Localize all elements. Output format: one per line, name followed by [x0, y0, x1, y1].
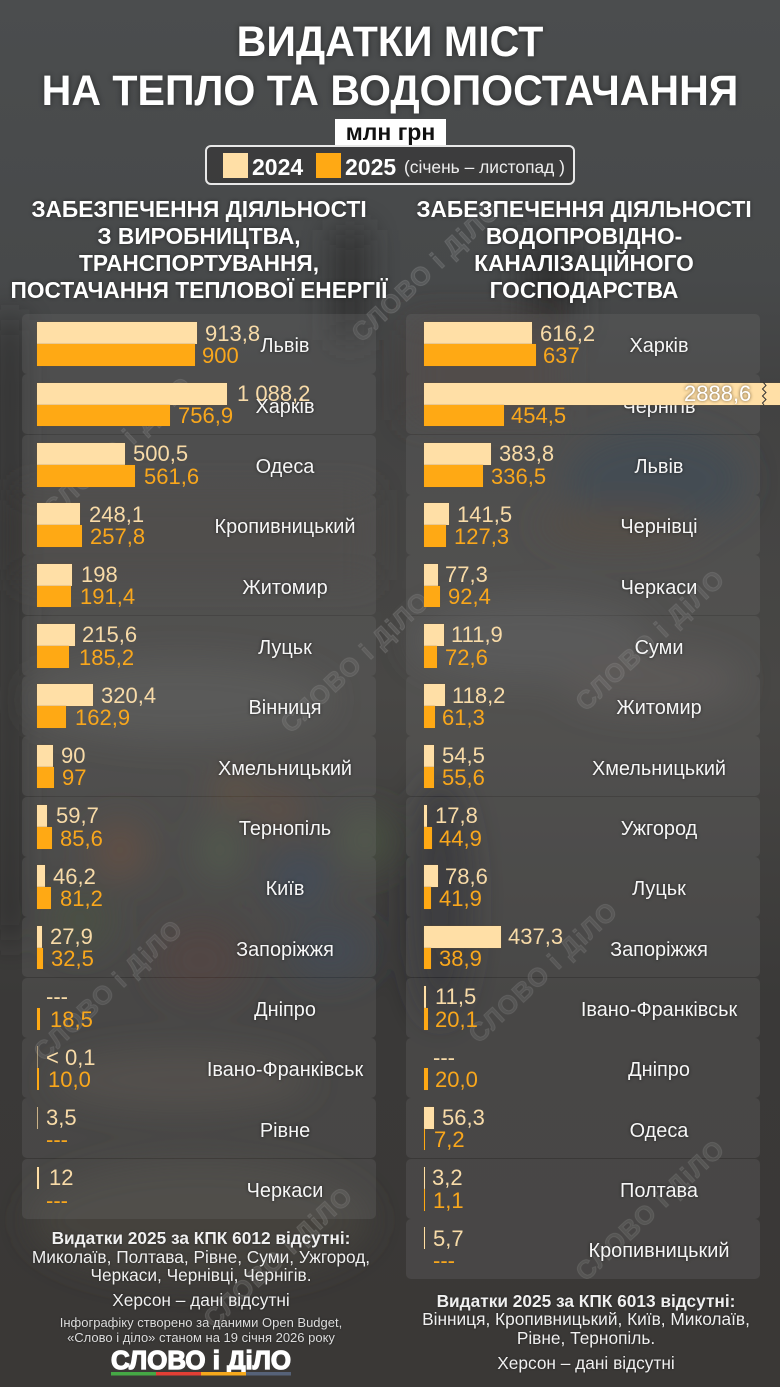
- row: Суми: Суми: [635, 637, 683, 659]
- row: Кропивницький: Кропивницький: [215, 516, 355, 538]
- row: Вінниця: 320,4: [101, 683, 156, 708]
- row: Харків: Харків: [255, 396, 315, 418]
- row: Житомир: 191,4: [80, 584, 135, 609]
- row: Одеса: [406, 1098, 760, 1158]
- row: Кропивницький: [22, 495, 376, 555]
- note: Kherson: Херсон – дані відсутні: [497, 1353, 675, 1373]
- row: Рівне: [22, 1098, 376, 1158]
- row: Дніпро: ---: [46, 984, 68, 1009]
- row: Кропивницький: ---: [433, 1248, 455, 1273]
- row: Івано-Франківськ: 10,0: [48, 1067, 91, 1092]
- row: Суми: [406, 616, 760, 676]
- row: Тернопіль: 85,6: [60, 826, 103, 851]
- row: Суми: 72,6: [445, 645, 488, 670]
- row: Харків: Харків: [629, 335, 689, 357]
- row: Київ: Київ: [266, 878, 304, 900]
- heading: heat: З ВИРОБНИЦТВА,: [97, 223, 301, 249]
- row: Львів: Львів: [260, 335, 309, 357]
- row: Луцьк: Луцьк: [258, 637, 312, 659]
- heading: water: ГОСПОДАРСТВА: [490, 277, 678, 303]
- heading: heat: ПОСТАЧАННЯ ТЕПЛОВОЇ ЕНЕРГІЇ: [11, 277, 387, 303]
- row: Житомир: 118,2: [452, 683, 505, 708]
- row: Запоріжжя: 38,9: [439, 946, 482, 971]
- row: Чернівці: Чернівці: [620, 516, 698, 538]
- heading: water: КАНАЛІЗАЦІЙНОГО: [474, 250, 694, 276]
- panel: heat chart: [22, 314, 376, 1219]
- note: missing water data: Вінниця, Кропивницький, Київ, Миколаїв,: [422, 1309, 750, 1329]
- icon: axis break zigzag: [762, 382, 767, 405]
- row: Чернігів: [406, 374, 760, 434]
- source credit: «Слово і діло» станом на 19 січня 2026 року: [67, 1330, 335, 1345]
- row: Полтава: 3,2: [432, 1165, 463, 1190]
- row: Одеса: 56,3: [442, 1105, 485, 1130]
- row: Львів: 336,5: [491, 464, 546, 489]
- row: Івано-Франківськ: < 0,1: [46, 1045, 96, 1070]
- legend: [205, 145, 575, 185]
- row: Львів: [406, 435, 760, 495]
- row: Чернівці: 141,5: [457, 502, 512, 527]
- title: ВИДАТКИ МІСТ: [237, 19, 543, 66]
- row: Івано-Франківськ: [22, 1038, 376, 1098]
- row: Ужгород: [406, 797, 760, 857]
- row: Кропивницький: [406, 1219, 760, 1279]
- row: Кропивницький: 5,7: [433, 1226, 464, 1251]
- row: Житомир: [22, 555, 376, 615]
- row: Київ: 46,2: [53, 864, 96, 889]
- row: Вінниця: Вінниця: [249, 697, 321, 719]
- row: Черкаси: Черкаси: [621, 577, 697, 599]
- row: Івано-Франківськ: 11,5: [435, 984, 476, 1009]
- row: Харків: 1 088,2: [237, 381, 310, 406]
- source credit: [60, 1315, 342, 1345]
- row: Ужгород: 17,8: [435, 803, 478, 828]
- row: Хмельницький: [406, 736, 760, 796]
- row: Львів: Львів: [634, 456, 683, 478]
- row: Черкаси: 92,4: [448, 584, 491, 609]
- row: Одеса: [22, 435, 376, 495]
- row: Тернопіль: 59,7: [56, 803, 99, 828]
- title: НА ТЕПЛО ТА ВОДОПОСТАЧАННЯ: [42, 68, 738, 115]
- row: Дніпро: 18,5: [50, 1007, 93, 1032]
- row: Хмельницький: 97: [62, 765, 86, 790]
- row: Рівне: Рівне: [260, 1120, 310, 1142]
- row: Івано-Франківськ: 20,1: [435, 1007, 478, 1032]
- row: Запоріжжя: Запоріжжя: [610, 939, 708, 961]
- note: missing heat data: Черкаси, Чернівці, Чернігів.: [90, 1265, 312, 1285]
- row: Черкаси: Черкаси: [247, 1180, 323, 1202]
- note heading: Видатки 2025 за КПК 6012 відсутні:: [52, 1228, 350, 1248]
- legend label 2024: 2024: [252, 154, 303, 180]
- row: Хмельницький: Хмельницький: [218, 758, 352, 780]
- row: Хмельницький: Хмельницький: [592, 758, 726, 780]
- row: Одеса: 561,6: [144, 464, 199, 489]
- note heading: Видатки 2025 за КПК 6013 відсутні:: [437, 1290, 735, 1310]
- legend period: (січень – листопад ): [404, 157, 565, 177]
- row: Житомир: Житомир: [616, 697, 702, 719]
- row: Кропивницький: Кропивницький: [589, 1240, 729, 1262]
- note: missing water data: Рівне, Тернопіль.: [517, 1328, 655, 1348]
- row: Київ: 81,2: [60, 886, 103, 911]
- watermark: СЛОВО і ДіЛО: [569, 1133, 731, 1287]
- note: missing water data: [422, 1290, 750, 1373]
- row: Чернігів: Чернігів: [622, 396, 696, 418]
- row: Харків: 756,9: [178, 403, 233, 428]
- note: missing heat data: Миколаїв, Полтава, Рівне, Суми, Ужгород,: [32, 1246, 370, 1266]
- row: Запоріжжя: Запоріжжя: [236, 939, 334, 961]
- row: Харків: 637: [543, 343, 580, 368]
- row: Полтава: [406, 1159, 760, 1219]
- row: Суми: 111,9: [451, 622, 503, 647]
- row: Тернопіль: [22, 797, 376, 857]
- row: Луцьк: 41,9: [439, 886, 482, 911]
- row: Дніпро: 20,0: [435, 1067, 478, 1092]
- note: missing heat data: [32, 1228, 370, 1310]
- row: Житомир: 61,3: [442, 705, 485, 730]
- heading: water: ВОДОПРОВІДНО-: [486, 223, 682, 249]
- watermark: СЛОВО і ДіЛО: [569, 563, 731, 717]
- row: Вінниця: 162,9: [75, 705, 130, 730]
- watermark: СЛОВО і ДіЛО: [197, 1180, 359, 1334]
- legend swatch 2025: [316, 153, 341, 178]
- heading: water: [416, 196, 752, 304]
- source credit: Інфографіку створено за даними Open Budget,: [60, 1315, 342, 1330]
- legend swatch 2024: [223, 153, 248, 178]
- watermark: СЛОВО і ДіЛО: [274, 585, 436, 739]
- heading: heat: ЗАБЕЗПЕЧЕННЯ ДІЯЛЬНОСТІ: [31, 196, 367, 222]
- row: Львів: [22, 314, 376, 374]
- row: Хмельницький: [22, 736, 376, 796]
- row: Хмельницький: 54,5: [442, 743, 485, 768]
- row: Дніпро: [22, 978, 376, 1038]
- row: Чернігів: 454,5: [511, 403, 566, 428]
- panel: water chart: [406, 314, 780, 1279]
- unit label: млн грн: [346, 119, 435, 145]
- row: Чернігів: 2888,6: [684, 381, 751, 406]
- row: Одеса: Одеса: [256, 456, 314, 478]
- row: Луцьк: 78,6: [445, 864, 488, 889]
- row: Дніпро: ---: [433, 1045, 455, 1070]
- row: Запоріжжя: [406, 917, 760, 977]
- row: Дніпро: Дніпро: [628, 1059, 690, 1081]
- title: [42, 19, 738, 115]
- row: Черкаси: [22, 1159, 376, 1219]
- row: Луцьк: 185,2: [79, 645, 134, 670]
- watermark: СЛОВО і ДіЛО: [345, 194, 507, 348]
- row: Луцьк: [22, 616, 376, 676]
- row: Харків: [22, 374, 376, 434]
- row: Ужгород: 44,9: [439, 826, 482, 851]
- watermark: СЛОВО і ДіЛО: [27, 913, 189, 1067]
- row: Житомир: [406, 676, 760, 736]
- row: Луцьк: 215,6: [82, 622, 137, 647]
- row: Одеса: Одеса: [630, 1120, 688, 1142]
- heading: heat: [10, 196, 388, 303]
- row: Черкаси: 12: [49, 1165, 73, 1190]
- row: Львів: 383,8: [499, 441, 554, 466]
- heading: heat: ТРАНСПОРТУВАННЯ,: [79, 250, 319, 276]
- row: Рівне: ---: [46, 1127, 68, 1152]
- row: Дніпро: Дніпро: [254, 999, 316, 1021]
- row: Полтава: 1,1: [433, 1188, 464, 1213]
- legend label 2025: 2025: [345, 154, 396, 180]
- row: Кропивницький: 257,8: [90, 524, 145, 549]
- row: Харків: [406, 314, 760, 374]
- row: Львів: 900: [202, 343, 239, 368]
- heading: water: ЗАБЕЗПЕЧЕННЯ ДІЯЛЬНОСТІ: [416, 196, 752, 222]
- row: Житомир: Житомир: [242, 577, 328, 599]
- row: Івано-Франківськ: Івано-Франківськ: [581, 999, 737, 1021]
- row: Ужгород: Ужгород: [621, 818, 697, 840]
- row: Тернопіль: Тернопіль: [239, 818, 331, 840]
- row: Одеса: 500,5: [133, 441, 188, 466]
- row: Черкаси: 77,3: [445, 562, 488, 587]
- row: Полтава: Полтава: [620, 1180, 698, 1202]
- row: Запоріжжя: 27,9: [50, 924, 93, 949]
- row: Харків: 616,2: [540, 321, 595, 346]
- watermark: СЛОВО і ДіЛО: [37, 370, 199, 524]
- row: Луцьк: [406, 857, 760, 917]
- row: Чернівці: [406, 495, 760, 555]
- row: Запоріжжя: 437,3: [508, 924, 563, 949]
- row: Запоріжжя: 32,5: [51, 946, 94, 971]
- row: Житомир: 198: [81, 562, 118, 587]
- row: Хмельницький: 90: [61, 743, 85, 768]
- row: Івано-Франківськ: [406, 978, 760, 1038]
- row: Кропивницький: 248,1: [89, 502, 144, 527]
- row: Дніпро: [406, 1038, 760, 1098]
- row: Чернівці: 127,3: [454, 524, 509, 549]
- row: Київ: [22, 857, 376, 917]
- row: Запоріжжя: [22, 917, 376, 977]
- row: Вінниця: [22, 676, 376, 736]
- row: Черкаси: ---: [46, 1188, 68, 1213]
- watermark: СЛОВО і ДіЛО: [462, 895, 624, 1049]
- row: Львів: 913,8: [205, 321, 260, 346]
- row: Рівне: 3,5: [46, 1105, 77, 1130]
- note: Kherson: Херсон – дані відсутні: [112, 1290, 290, 1310]
- row: Луцьк: Луцьк: [632, 878, 686, 900]
- row: Івано-Франківськ: Івано-Франківськ: [207, 1059, 363, 1081]
- row: Черкаси: [406, 555, 760, 615]
- row: Хмельницький: 55,6: [442, 765, 485, 790]
- row: Одеса: 7,2: [434, 1127, 465, 1152]
